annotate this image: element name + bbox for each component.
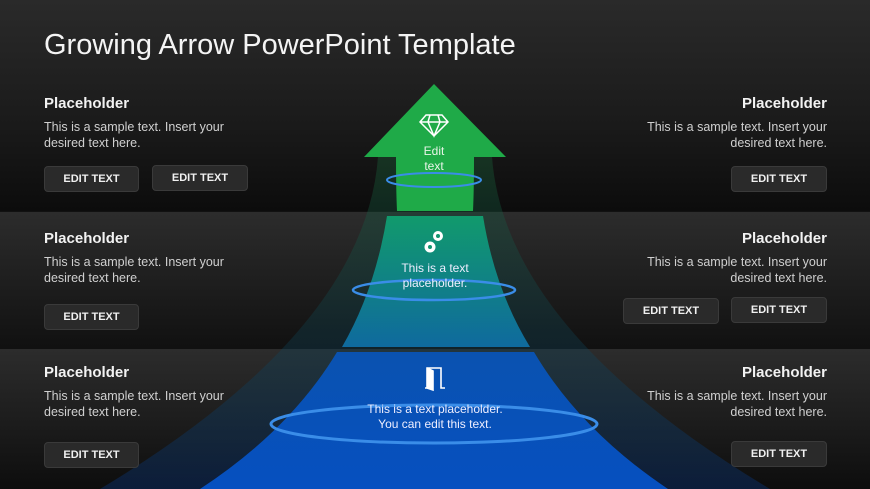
segment 1: arrow head xyxy=(364,84,506,211)
panel: right top xyxy=(647,95,827,192)
panel: right middle: EDIT TEXT xyxy=(751,304,807,316)
panel: right bottom: desired text here. xyxy=(730,405,827,419)
panel: left top: EDIT TEXT xyxy=(63,173,120,185)
panel: right middle: desired text here. xyxy=(730,271,827,285)
panel: left top: This is a sample text. Insert your xyxy=(44,120,224,134)
segment 3 xyxy=(200,352,668,489)
panel: right middle: Placeholder xyxy=(742,230,827,247)
title: Growing Arrow PowerPoint Template xyxy=(44,29,516,61)
text: You can edit this text. xyxy=(378,417,492,431)
panel: right middle: This is a sample text. Insert your xyxy=(647,255,827,269)
text: placeholder. xyxy=(403,276,467,290)
panel: left bottom: EDIT TEXT xyxy=(63,449,120,461)
panel: right top: EDIT TEXT xyxy=(751,173,807,185)
panel: right middle: EDIT TEXT xyxy=(643,305,699,317)
panel: left top: Placeholder xyxy=(44,95,129,112)
panel: left middle: Placeholder xyxy=(44,230,129,247)
panel: left middle xyxy=(44,230,224,330)
panel: right top: desired text here. xyxy=(730,136,827,150)
arrow labels xyxy=(424,144,444,173)
panel: left middle: desired text here. xyxy=(44,271,141,285)
panel: right middle xyxy=(623,230,827,324)
panel: right bottom: This is a sample text. Insert your xyxy=(647,389,827,403)
panel: right top: Placeholder xyxy=(742,95,827,112)
ring 1 xyxy=(387,173,481,187)
ring 3 xyxy=(271,405,597,443)
icon: diamond xyxy=(420,115,448,136)
icon: door xyxy=(425,368,445,390)
panel: left top xyxy=(44,95,248,192)
icon: gears xyxy=(424,231,443,252)
text: This is a text xyxy=(401,261,469,275)
panel: left top: EDIT TEXT xyxy=(172,172,228,184)
panel: right top: This is a sample text. Insert your xyxy=(647,120,827,134)
arrow labels: Edit xyxy=(424,144,444,158)
panel: right bottom: EDIT TEXT xyxy=(751,448,807,460)
ring 2 xyxy=(353,280,515,300)
panel: left bottom: Placeholder xyxy=(44,364,129,381)
panel: left bottom: This is a sample text. Insert your xyxy=(44,389,224,403)
panel: right bottom: Placeholder xyxy=(742,364,827,381)
panel: left bottom xyxy=(44,364,224,468)
panel: left top: desired text here. xyxy=(44,136,141,150)
arrow labels: text xyxy=(424,159,444,173)
text: This is a text placeholder. xyxy=(367,402,503,416)
panel: left bottom: desired text here. xyxy=(44,405,141,419)
shadow lane xyxy=(100,157,770,489)
panel: left middle: This is a sample text. Insert your xyxy=(44,255,224,269)
segment 2 xyxy=(342,216,530,347)
panel: left middle: EDIT TEXT xyxy=(63,311,120,323)
panel: right bottom xyxy=(647,364,827,467)
